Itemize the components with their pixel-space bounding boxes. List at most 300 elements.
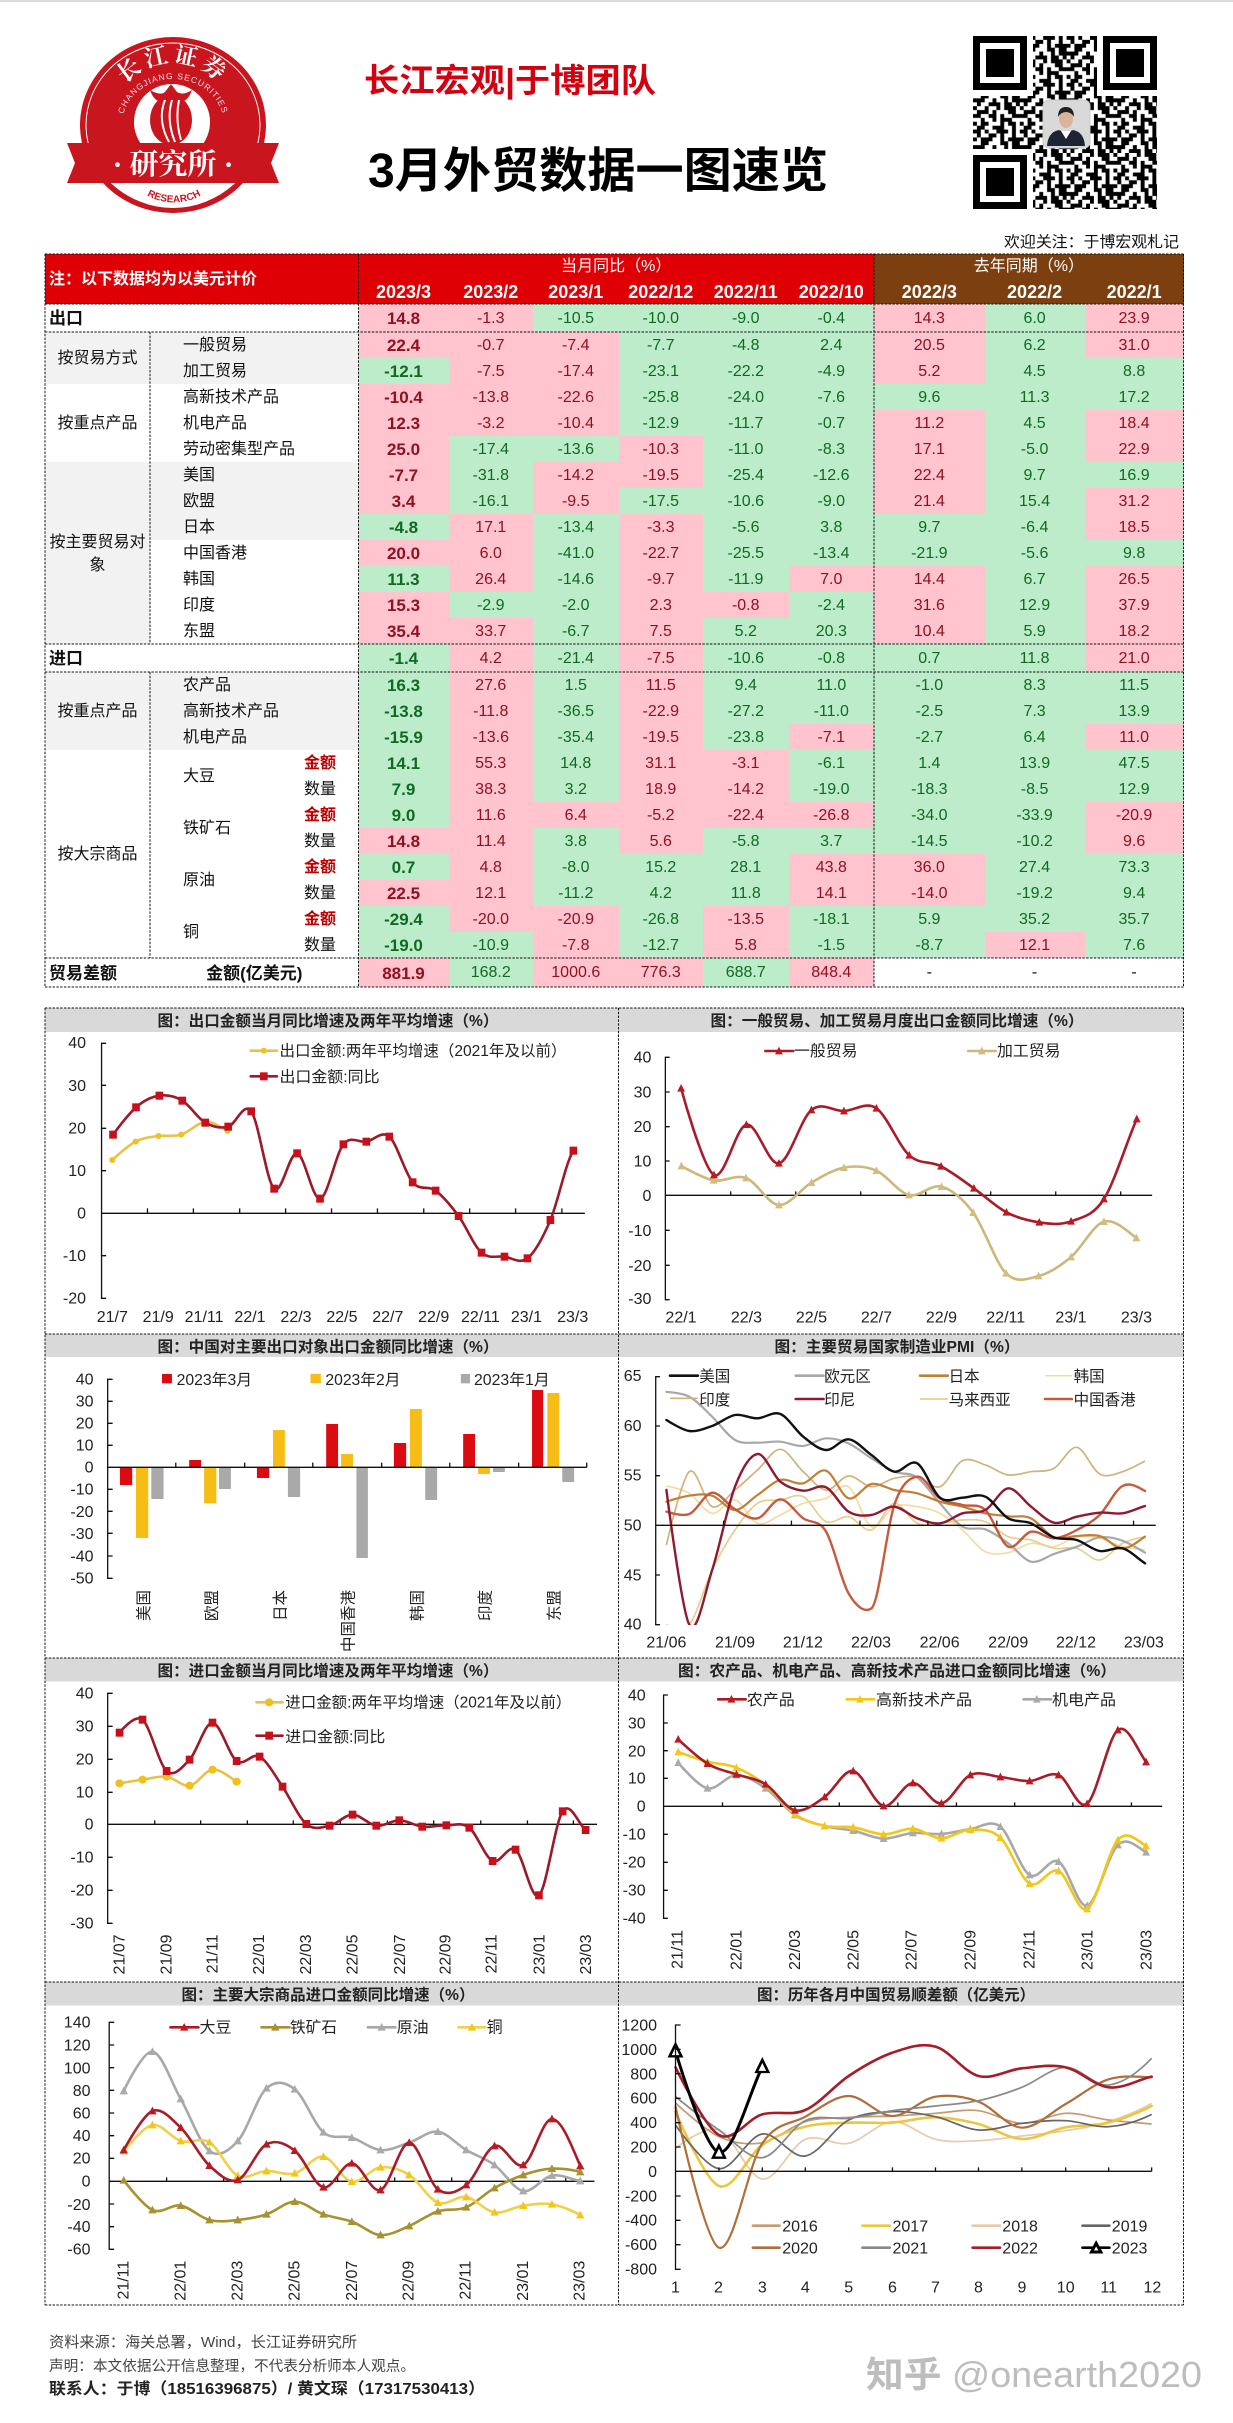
panel: PMI of main trade partners: 50	[624, 1517, 642, 1534]
data table: -11.7	[728, 415, 763, 432]
panel: import value growth: 22/01	[251, 1934, 268, 1975]
data table: -2.4	[818, 597, 845, 614]
panel: export value growth: 22/7	[372, 1309, 403, 1326]
data table: -20.9	[1116, 807, 1152, 824]
panel: exports by destination: 美国	[135, 1590, 153, 1621]
data table: -2.5	[916, 703, 943, 720]
data table: -21.9	[911, 545, 948, 562]
data table: -35.4	[558, 729, 594, 746]
data table: 0.7	[918, 650, 940, 667]
panel: export value growth: 30	[68, 1078, 86, 1095]
panel: export value growth	[45, 1008, 618, 1326]
QR code	[971, 34, 1159, 211]
data table: 2023/3	[376, 282, 431, 302]
panel: bulk commodity imports: 60	[73, 2105, 91, 2122]
data table: 进口	[49, 649, 83, 668]
panel: imports by product: 40	[628, 1687, 646, 1704]
panel: exports by destination: 2023年1月	[474, 1371, 550, 1389]
data table: 12.3	[387, 414, 420, 433]
panel: bulk commodity imports: 0	[82, 2173, 91, 2190]
data table: 2022/2	[1007, 282, 1062, 302]
data table: 6.2	[1023, 337, 1046, 354]
data table: 688.7	[726, 964, 766, 981]
data table: 3.4	[392, 492, 415, 511]
data table: 7.5	[650, 623, 672, 640]
panel: PMI of main trade partners: 55	[624, 1467, 642, 1484]
data table: -25.8	[643, 389, 679, 406]
data table: -14.0	[911, 885, 948, 902]
data table: -13.4	[813, 545, 850, 562]
heading: 图：中国对主要出口对象出口金额同比增速（%）	[158, 1337, 498, 1356]
panel: exports by destination: 30	[76, 1394, 94, 1411]
panel: bulk commodity imports: 20	[73, 2151, 91, 2168]
panel: import value growth: 10	[76, 1785, 94, 1802]
data table: -23.8	[728, 729, 764, 746]
panel: general vs processing trade: 23/1	[1055, 1310, 1087, 1326]
panel: monthly trade surplus: 2016	[782, 2219, 818, 2236]
footer: source note: 资料来源：海关总署，Wind，长江证券研究所	[49, 2334, 357, 2351]
data table: 16.3	[387, 676, 420, 695]
data table: -5.6	[732, 519, 760, 536]
data table: 35.2	[1019, 911, 1050, 928]
data table: 11.2	[914, 415, 944, 432]
panel: bulk commodity imports: 23/03	[572, 2261, 589, 2301]
panel: export value growth: 23/3	[557, 1309, 588, 1326]
panel: bulk commodity imports: 21/11	[116, 2261, 132, 2300]
follow note: 欢迎关注：于博宏观札记	[1004, 233, 1179, 251]
panel: imports by product: 23/03	[1139, 1930, 1156, 1970]
panel: PMI of main trade partners: 40	[624, 1616, 642, 1633]
data table: 金额	[304, 911, 336, 928]
panel: imports by product: 22/03	[787, 1930, 804, 1970]
panel: monthly trade surplus: 2023	[1112, 2240, 1147, 2257]
data table: -12.1	[384, 362, 423, 381]
panel: general vs processing trade: -30	[628, 1291, 652, 1308]
data table: -17.4	[558, 363, 594, 380]
data table: 3.8	[820, 519, 842, 536]
data table: 38.3	[475, 781, 506, 798]
panel: general vs processing trade: 一般贸易	[794, 1042, 858, 1060]
panel: imports by product: -10	[623, 1827, 646, 1844]
data table: 18.2	[1119, 623, 1150, 640]
data table: 37.9	[1119, 597, 1150, 614]
data table: 按重点产品	[57, 703, 138, 720]
heading: 图：一般贸易、加工贸易月度出口金额同比增速（%）	[710, 1011, 1084, 1030]
data table: 35.4	[387, 622, 420, 641]
data table: -14.2	[558, 467, 594, 484]
data table: 3.8	[565, 833, 587, 850]
line chart	[109, 2022, 594, 2249]
data table: -3.3	[647, 519, 675, 536]
data table: 一般贸易	[183, 337, 247, 354]
data table: 数量	[304, 781, 336, 798]
panel: bulk commodity imports: 22/05	[286, 2261, 304, 2301]
data table: -26.8	[813, 807, 850, 824]
panel: export value growth: -20	[63, 1291, 86, 1308]
panel: imports by product	[619, 1658, 1184, 1970]
data table: 18.5	[1119, 519, 1150, 536]
data table: -31.8	[473, 467, 509, 484]
data table: -12.6	[813, 467, 850, 484]
data table: -19.0	[384, 936, 423, 955]
panel: export value growth: 出口金额:同比	[280, 1068, 380, 1086]
table grid	[45, 254, 1184, 987]
panel: general vs processing trade: -20	[628, 1258, 652, 1275]
data table: -20.0	[473, 911, 509, 928]
panel: exports by destination: 10	[76, 1438, 94, 1455]
panel: import value growth: 22/05	[345, 1934, 362, 1975]
logo: Changjiang Securities research badge: 长江证券	[116, 44, 226, 82]
panel: monthly trade surplus: 0	[648, 2164, 657, 2181]
data table: -23.1	[643, 363, 679, 380]
data table: 数量	[304, 833, 336, 850]
data table: -11.0	[814, 703, 849, 720]
data table: 9.6	[918, 389, 940, 406]
title: 3月外贸数据一图速览	[368, 145, 828, 198]
footer: contacts: 联系人：于博（18516396875）/ 黄文琛（17317530413）	[49, 2379, 485, 2398]
panel: PMI of main trade partners: 22/12	[1056, 1634, 1096, 1651]
watermark: 知乎 @onearth2020	[866, 2354, 1202, 2395]
panel: imports by product: 22/05	[845, 1930, 862, 1970]
panel: imports by product: 0	[637, 1799, 646, 1816]
data table: -36.5	[558, 703, 594, 720]
line chart	[102, 1043, 585, 1298]
data table: -22.2	[728, 363, 764, 380]
panel: import value growth: 22/07	[392, 1934, 409, 1975]
data table: 铁矿石	[183, 820, 231, 837]
panel: import value growth: -20	[70, 1883, 94, 1900]
panel: import value growth: 30	[76, 1719, 94, 1736]
data table: 9.7	[1023, 467, 1046, 484]
data table: -18.1	[813, 911, 850, 928]
data table: 2.4	[820, 337, 842, 354]
data table: -7.7	[647, 337, 675, 354]
data table: -10.4	[558, 415, 594, 432]
data table: -11.2	[558, 885, 593, 902]
data table: -18.3	[911, 781, 948, 798]
data table: 象	[89, 557, 106, 574]
panel: PMI of main trade partners: 欧元区	[824, 1368, 871, 1386]
data table: -19.5	[643, 729, 679, 746]
data table: 劳动密集型产品	[183, 441, 295, 458]
data table: -10.6	[728, 650, 764, 667]
data table: 4.5	[1023, 415, 1046, 432]
data table: 金额(亿美元)	[206, 964, 302, 983]
data table: -8.5	[1021, 781, 1048, 798]
panel: imports by product: 30	[628, 1716, 646, 1733]
data table: 14.1	[816, 885, 847, 902]
line chart	[108, 1693, 597, 1923]
data table: 28.1	[730, 859, 761, 876]
data table: 15.2	[645, 859, 676, 876]
data table: -26.8	[643, 911, 679, 928]
data table: -4.8	[389, 518, 418, 537]
panel: monthly trade surplus	[619, 1982, 1184, 2297]
data table: 5.2	[918, 363, 940, 380]
panel: imports by product: 高新技术产品	[876, 1691, 972, 1709]
data table: 贸易差额	[49, 964, 117, 983]
data table: 6.4	[565, 807, 587, 824]
data table: 11.0	[816, 677, 846, 694]
panel: general vs processing trade: 22/7	[861, 1310, 892, 1326]
panel: general vs processing trade: -10	[628, 1223, 652, 1240]
data table: -12.7	[643, 937, 679, 954]
data table: 17.1	[914, 441, 945, 458]
panel: import value growth: 23/03	[578, 1934, 595, 1975]
data table: -6.7	[562, 623, 590, 640]
data table: -8.0	[562, 859, 590, 876]
data table: 9.0	[392, 806, 415, 825]
panel: export value growth: 21/9	[143, 1309, 174, 1326]
data table: 3.2	[565, 781, 587, 798]
bar chart	[108, 1374, 587, 1578]
data table: 14.8	[560, 755, 591, 772]
data table: -5.2	[647, 807, 675, 824]
data table: 东盟	[183, 623, 215, 640]
icon: portrait photo	[1043, 100, 1090, 148]
panel: imports by product: 机电产品	[1052, 1691, 1116, 1709]
panel: monthly trade surplus: 2	[714, 2280, 723, 2297]
panel: exports by destination: 0	[85, 1460, 94, 1477]
data table: 31.6	[914, 597, 945, 614]
data table: 日本	[183, 519, 215, 536]
panel: monthly trade surplus: 200	[630, 2140, 657, 2157]
panel: bulk commodity imports: 120	[64, 2037, 91, 2054]
data table: -14.5	[911, 833, 948, 850]
data table: 13.9	[1119, 703, 1150, 720]
data table: 2022/11	[714, 282, 778, 302]
data table: -14.6	[558, 571, 594, 588]
data table: 金额	[304, 807, 336, 824]
panel: import value growth: 22/11	[484, 1934, 501, 1973]
data table: 机电产品	[183, 729, 247, 746]
data table: -9.5	[562, 493, 590, 510]
data table: 高新技术产品	[183, 703, 279, 720]
logo: Changjiang Securities research badge: CHANGJIANG SECURITIES	[118, 73, 228, 113]
panel: general vs processing trade: 40	[634, 1050, 652, 1067]
panel: export value growth: -10	[63, 1248, 86, 1265]
data table: 17.2	[1119, 389, 1150, 406]
panel: monthly trade surplus: 800	[630, 2066, 657, 2083]
panel: PMI of main trade partners: 22/06	[920, 1634, 960, 1651]
panel: PMI of main trade partners: 中国香港	[1074, 1391, 1136, 1409]
panel: monthly trade surplus: -200	[625, 2189, 657, 2206]
data table: 7.9	[392, 780, 415, 799]
panel: import value growth: 0	[85, 1816, 94, 1833]
data table: 21.0	[1119, 650, 1150, 667]
data table: 15.3	[387, 596, 420, 615]
data table: -10.6	[728, 493, 764, 510]
data table: 168.2	[471, 964, 511, 981]
panel: exports by destination: 印度	[477, 1590, 495, 1621]
panel: exports by destination: -10	[70, 1482, 94, 1499]
data table: -2.7	[916, 729, 943, 746]
panel: PMI of main trade partners: 韩国	[1074, 1368, 1105, 1386]
panel: PMI of main trade partners: 45	[624, 1567, 642, 1584]
data table: 35.7	[1119, 911, 1150, 928]
data table: 12.9	[1019, 597, 1050, 614]
data table: -5.8	[732, 833, 760, 850]
panel: bulk commodity imports: 23/01	[515, 2261, 532, 2301]
data table: -11.9	[728, 571, 763, 588]
data table: 按主要贸易对	[49, 534, 146, 551]
data table: -3.1	[732, 755, 760, 772]
panel: general vs processing trade: 23/3	[1121, 1310, 1152, 1326]
panel: monthly trade surplus: -600	[625, 2237, 657, 2254]
data table: 25.0	[387, 440, 420, 459]
panel: import value growth: 22/09	[438, 1934, 455, 1975]
panel: PMI of main trade partners: 马来西亚	[949, 1391, 1011, 1409]
data table: 22.9	[1119, 441, 1150, 458]
data table: 按大宗商品	[57, 846, 138, 863]
data table: 2022/10	[799, 282, 864, 302]
panel: export value growth: 23/1	[511, 1309, 542, 1326]
panel: monthly trade surplus: 2022	[1002, 2240, 1038, 2257]
data table: -25.4	[728, 467, 764, 484]
panel: PMI of main trade partners: 22/09	[988, 1634, 1028, 1651]
panel: export value growth: 22/9	[418, 1309, 449, 1326]
data table: -19.0	[813, 781, 850, 798]
data table: 22.4	[387, 336, 420, 355]
panel: bulk commodity imports: -40	[67, 2219, 91, 2236]
data table: -6.1	[818, 755, 845, 772]
heading: 图：主要贸易国家制造业PMI（%）	[774, 1337, 1020, 1356]
data table: 18.9	[645, 781, 676, 798]
data table: -17.5	[643, 493, 679, 510]
data table: 14.8	[387, 309, 420, 328]
data table: -24.0	[728, 389, 764, 406]
panel: import value growth: -30	[70, 1916, 94, 1933]
panel: monthly trade surplus: 11	[1100, 2280, 1117, 2297]
data table: 11.3	[1020, 389, 1050, 406]
panel: exports by destination: 20	[76, 1416, 94, 1433]
panel: monthly trade surplus: 12	[1144, 2280, 1161, 2297]
data table: 21.4	[914, 493, 945, 510]
panel: bulk commodity imports: 22/09	[400, 2261, 418, 2301]
panel: imports by product: 23/01	[1080, 1930, 1097, 1970]
data table: -10.3	[643, 441, 679, 458]
data table: 11.5	[1119, 677, 1149, 694]
panel: PMI of main trade partners: 21/06	[646, 1634, 687, 1651]
data table: -1.5	[818, 937, 845, 954]
data table: 26.5	[1119, 571, 1150, 588]
data table: 10.4	[914, 623, 945, 640]
panel: bulk commodity imports: 80	[73, 2083, 91, 2100]
logo: Changjiang Securities research badge: RESEARCH	[148, 190, 200, 202]
panel: monthly trade surplus: 3	[758, 2280, 767, 2297]
data table: -8.3	[818, 441, 845, 458]
data table: 9.4	[735, 677, 757, 694]
panel: exports by destination: 2023年3月	[177, 1371, 252, 1389]
panel: bulk commodity imports: -60	[67, 2241, 91, 2258]
data table: 5.8	[735, 937, 757, 954]
data table: 8.3	[1023, 677, 1046, 694]
panel: imports by product: -20	[623, 1855, 646, 1872]
panel: exports by destination: -30	[70, 1526, 94, 1543]
data table: 韩国	[183, 571, 215, 588]
data table: 15.4	[1019, 493, 1050, 510]
data table: 高新技术产品	[183, 389, 279, 406]
panel: import value growth: 进口金额:两年平均增速（2021年及以前）	[285, 1694, 571, 1712]
data table: 31.2	[1119, 493, 1150, 510]
footer: disclaimer: 声明：本文依据公开信息整理，不代表分析师本人观点。	[49, 2357, 415, 2375]
panel: monthly trade surplus: 400	[630, 2115, 657, 2132]
data table: -11.8	[473, 703, 508, 720]
data table: 7.6	[1123, 937, 1145, 954]
heading: 图：农产品、机电产品、高新技术产品进口金额同比增速（%）	[678, 1661, 1116, 1680]
data table: -6.4	[1021, 519, 1048, 536]
panel: import value growth: 21/11	[204, 1934, 221, 1973]
data table: 7.0	[820, 571, 842, 588]
panel: bulk commodity imports: 22/07	[344, 2261, 361, 2301]
data table: -15.9	[384, 728, 423, 747]
data table: -7.8	[562, 937, 590, 954]
data table: -7.5	[647, 650, 675, 667]
panel: monthly trade surplus: 6	[888, 2280, 897, 2297]
data table: 数量	[304, 937, 336, 954]
panel: monthly trade surplus: 1000	[621, 2042, 657, 2059]
panel: general vs processing trade: 22/9	[926, 1310, 957, 1326]
data table: 4.5	[1023, 363, 1046, 380]
data table: 数量	[304, 885, 336, 902]
data table: -2.9	[477, 597, 505, 614]
panel: monthly trade surplus: 1	[671, 2280, 680, 2297]
panel: monthly trade surplus: 2017	[892, 2219, 928, 2236]
data table: 9.8	[1123, 545, 1145, 562]
data table: 6.0	[480, 545, 502, 562]
panel: export value growth: 22/5	[326, 1309, 358, 1326]
data table: 18.4	[1119, 415, 1150, 432]
panel: export value growth: 0	[77, 1206, 86, 1223]
panel: PMI of main trade partners: 21/09	[715, 1634, 755, 1651]
panel: PMI of main trade partners: 22/03	[851, 1634, 891, 1651]
panel: monthly trade surplus: 600	[630, 2090, 657, 2107]
panel: imports by product: 22/07	[904, 1930, 920, 1970]
data table: 4.2	[650, 885, 672, 902]
data table: 加工贸易	[183, 363, 247, 380]
data table: -2.0	[562, 597, 590, 614]
data table: 当月同比（%）	[561, 258, 671, 275]
data table: -10.5	[558, 310, 594, 327]
panel: bulk commodity imports: 22/03	[230, 2261, 246, 2301]
heading: 图：历年各月中国贸易顺差额（亿美元）	[757, 1985, 1035, 2004]
data table: 出口	[49, 309, 83, 328]
panel: export value growth: 21/7	[97, 1309, 128, 1326]
data table: 印度	[183, 597, 215, 614]
panel: import value growth: 22/03	[298, 1934, 315, 1975]
data table: 1.4	[918, 755, 940, 772]
data table: 农产品	[183, 677, 231, 694]
panel: bulk commodity imports	[45, 1982, 618, 2301]
data table: 47.5	[1119, 755, 1150, 772]
data table: -0.4	[818, 310, 845, 327]
logo: Changjiang Securities research badge: · 研究所 ·	[113, 148, 233, 181]
data table: -34.0	[911, 807, 948, 824]
data table: -5.6	[1021, 545, 1048, 562]
data table: -1.4	[389, 649, 418, 668]
data table: -22.6	[558, 389, 594, 406]
data table: -33.9	[1016, 807, 1053, 824]
panel: PMI of main trade partners: 美国	[699, 1368, 730, 1386]
data table: 12.9	[1119, 781, 1150, 798]
panel: monthly trade surplus: -800	[625, 2261, 657, 2278]
panel: PMI of main trade partners: 60	[624, 1418, 642, 1435]
data table: -22.9	[643, 703, 679, 720]
data table: 原油	[183, 872, 215, 889]
data table: 按贸易方式	[57, 350, 138, 367]
data table: -13.6	[473, 729, 509, 746]
data table	[45, 254, 1184, 987]
